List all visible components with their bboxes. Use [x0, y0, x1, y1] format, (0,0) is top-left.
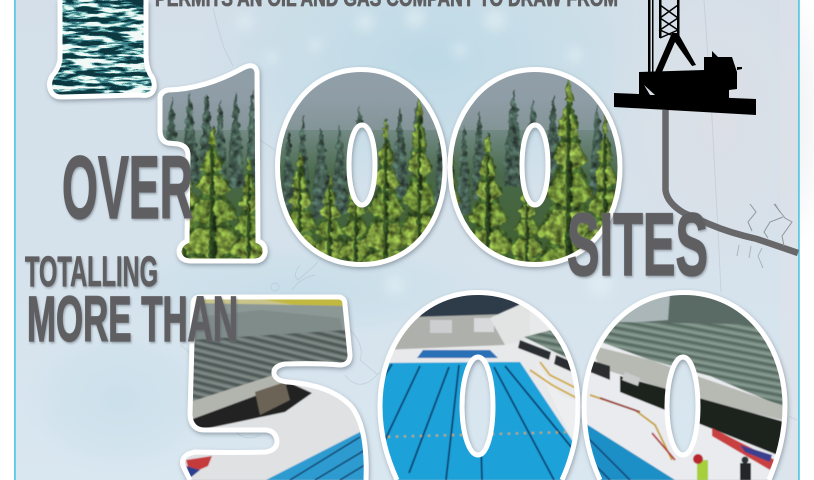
icon: fracture cracks	[737, 204, 792, 268]
label: OVER: OVER	[62, 137, 193, 237]
second digit 0 with forest photo	[446, 66, 626, 272]
second digit 0 with arena photo	[580, 288, 790, 480]
pool numeral 500	[180, 288, 790, 480]
well pipe	[666, 110, 798, 253]
forest numeral 100	[150, 55, 632, 276]
water-textured numeral 1	[45, 0, 160, 102]
label: MORE THAN: MORE THAN	[27, 283, 238, 355]
label: TOTALLING: TOTALLING	[25, 248, 158, 296]
icon: drilling rig silhouette	[614, 0, 756, 115]
first digit 0 with pool photo	[375, 288, 600, 480]
first digit 0 with forest photo	[274, 66, 449, 272]
people on pool deck	[693, 454, 751, 480]
digit 1 with forest photo	[156, 63, 271, 268]
digit 5 with arena photo	[180, 295, 375, 480]
